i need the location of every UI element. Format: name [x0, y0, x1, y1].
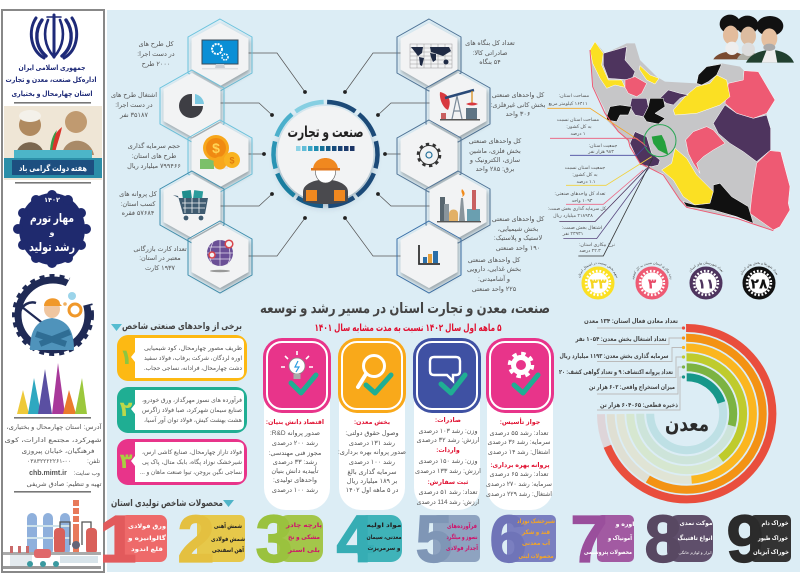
card: establishment licenses: پروانه بهره برداری:: [490, 462, 550, 469]
chart labels: تعداد معادن فعال استان: ۱۳۴ معدن: [584, 318, 678, 325]
product 1: steel sheet: قلع اندود: [131, 546, 163, 553]
caption: metal units: بخش فلزی، ماشین: [469, 148, 521, 155]
product 3: textile: [255, 502, 323, 574]
box 1: دشت چهارمحال، فرادانه، نساجی حجاب.: [144, 365, 242, 372]
chart heading: معدن: [665, 413, 709, 436]
card: mining sector: رشد ۱۰۰ درصدی: [349, 459, 395, 466]
caption: trade cards: ۱۹۳۷ کارت: [145, 265, 176, 272]
caption: export firms: تعداد کل بنگاه های: [465, 39, 515, 47]
card: knowledge economy: اقتصاد دانش بنیان:: [266, 419, 324, 426]
stat: share of country: [632, 262, 672, 300]
card: establishment licenses: تعداد: رشد ۵۵ درصدی: [489, 430, 549, 437]
caption: export firms: صادراتی کالا:: [473, 50, 508, 57]
stat: districts: ۲۸: [750, 276, 768, 292]
card: knowledge economy: رشد ۱۰۰ درصدی: [272, 487, 318, 494]
product 1: steel sheet: [99, 502, 167, 574]
card: exports and imports: [413, 338, 481, 510]
card: establishment licenses: اشتغال: رشد ۲۲۹ درصدی: [486, 491, 552, 498]
picture: government week banner: هفته دولت گرامی باد: [19, 163, 87, 173]
card: establishment licenses: جواز تأسیس:: [500, 417, 540, 426]
label: population: جمعیت استان:: [589, 143, 617, 149]
stat: industry jobs share: سهم بخش صنعت در اشتغال استان: [578, 262, 618, 278]
label: unemployment: نرخ بیکاری استان:: [579, 242, 615, 248]
product 5: refractory: آجدار فولادی: [446, 543, 479, 552]
product 4: minerals and cement: و سرمریزت: [368, 545, 401, 552]
caption: permits: کل پروانه های: [119, 191, 158, 198]
box 1: ۱: [120, 346, 132, 369]
product 1: steel sheet: گالوانیزه و: [127, 534, 166, 542]
caption: metal units: سازی، الکترونیک و: [469, 157, 520, 164]
stat: counties: تعداد شهرستان های استان: [690, 261, 724, 272]
hexagon: investment coins: [188, 120, 252, 192]
caption: food units: بخش غذایی، دارویی: [467, 266, 521, 273]
product 3: textile: بلی استر: [287, 547, 320, 554]
caption: non-metal mineral units: [491, 92, 546, 118]
label: population share: به کل کشور:: [572, 172, 598, 178]
map labels: [548, 93, 617, 254]
product 1: steel sheet: ورق فولادی: [128, 523, 166, 530]
caption: chemical units: ۱۹۰ واحد صنعتی: [496, 245, 540, 252]
caption: trade cards: تعداد کارت بازرگانی: [133, 245, 187, 253]
center circle: industry and trade: [252, 81, 399, 227]
card: mining sector: رشد ۱۳۱ درصدی: [349, 440, 395, 447]
caption: food units: کل واحدهای صنعتی: [468, 257, 521, 264]
product 9: animal feed: خوراک آبزیان: [753, 547, 789, 556]
address block: ۰۳۸۳۲۲۲۲۲۶۱-۰۰: [27, 459, 71, 465]
product 2: steel billet: [177, 502, 245, 574]
label: investment: کل سرمایه گذاری بخش صمت:: [548, 205, 607, 212]
product 3: textile: پارچه چادر: [285, 522, 322, 529]
product 8: carpets: انواع تافتینگ: [678, 534, 712, 542]
caption: project jobs: [111, 92, 157, 119]
chart labels: میزان استخراج واقعی: ۶۰۲ هزار تن: [589, 384, 675, 391]
badge: year slogan: مهار تورم: [30, 211, 74, 226]
badge: year slogan: و: [49, 228, 55, 237]
panel: right hexagons: [397, 19, 490, 293]
card: knowledge economy: مجوز فنی مهندسی:: [269, 450, 321, 457]
chart labels: [559, 318, 679, 409]
icon: magnifier with check: [358, 356, 391, 393]
label: industrial units: تعداد کل واحدهای صنعتی:: [554, 191, 606, 197]
badge: year slogan: ۱۴۰۲: [44, 197, 60, 204]
caption: permits: ۵۷۶۸۴ فقره: [122, 210, 155, 217]
sidebar heading: جمهوری اسلامی ایران: [18, 65, 86, 72]
label: population share: [565, 165, 605, 185]
product 4: minerals and cement: معدنی، سیمان: [366, 534, 402, 541]
caption: metal units: کل واحدهای صنعتی: [469, 138, 522, 145]
product 7: petrochemicals: محصولات پتروشیمی: [584, 549, 632, 556]
product 8: carpets: [644, 502, 713, 574]
card: establishment licenses: سرمایه: رشد ۳۶ درصدی: [487, 439, 550, 446]
label: population: ۹۸۳ هزار نفر: [587, 149, 614, 155]
stat: industry jobs share: [578, 262, 618, 300]
card: knowledge economy: واحدهای تولیدی:: [273, 477, 317, 484]
caption: non-metal mineral units: بخش کانی غیرفلزی:: [491, 102, 546, 109]
product 8: carpets: موکت نمدی: [680, 520, 713, 527]
label: unemployment: [579, 242, 615, 254]
card: exports and imports: ارزش: رشد 114 درصدی: [416, 499, 480, 506]
product 2: steel billet: شمش فولادی: [211, 536, 245, 543]
main section title: صنعت، معدن و تجارت استان در مسیر رشد و توسعه: [260, 301, 550, 317]
box 3: نساجی نگین بروجن، تیوا صنعت ماهان و ...: [140, 468, 242, 476]
panel: left hexagon captions: [111, 41, 187, 272]
hexagon: shopping cart: [160, 171, 224, 243]
chart labels: تعداد پروانه اکتشاف: ۹ و تعداد گواهی کشف: ۲۰: [559, 368, 673, 376]
card: mining sector: بخش معدن:: [354, 419, 390, 426]
label: population share: جمعیت استان نسبت: [565, 165, 605, 171]
caption: food units: ۲۲۵ واحد صنعتی: [472, 286, 517, 293]
label: area share: ۱ درصد: [571, 132, 585, 137]
hexagon: gear: [397, 120, 461, 192]
label: industrial units: ۱۰۹۳ واحد: [572, 198, 593, 204]
stat: counties: ۱۱: [697, 276, 715, 292]
product 5: refractory: فرآورده‌های: [447, 521, 477, 530]
stat: industry jobs share: ۳۳: [589, 276, 607, 292]
card: exports and imports: صادرات:: [435, 417, 461, 424]
chart labels: ذخیره قطعی: ۶۰۴۰۶۵ هزار تن: [600, 402, 679, 409]
caption: project jobs: ۳۵۱۸۷ نفر: [119, 112, 148, 119]
leader dots: [682, 326, 685, 379]
card: exports and imports: تعداد: رشد ۵۱ درصدی: [418, 489, 478, 496]
caption: projects: [137, 41, 175, 68]
caption: chemical units: [492, 216, 545, 252]
hexagon: bar chart: [397, 221, 461, 293]
product 3: textile: مشکی و نخ: [288, 534, 320, 541]
caption: projects: کل طرح های: [138, 41, 174, 48]
product 8: carpets: ابزار و لوازم خانگی: [678, 550, 712, 555]
caption: non-metal mineral units: ۳۰۶ واحد: [506, 111, 530, 118]
caption: projects: در دست اجرا:: [137, 51, 175, 58]
label: investment: ۲۱۸۹۴۸ میلیارد ریال: [553, 213, 593, 219]
card: knowledge economy: [263, 338, 331, 510]
caption: metal units: [469, 138, 522, 173]
label: population share: ۱.۱ درصد: [577, 180, 595, 185]
panel: right hexagon captions: [465, 39, 546, 293]
product 9: animal feed: [726, 502, 791, 574]
caption: food units: [467, 257, 521, 293]
chart labels: تعداد اشتغال بخش معدن: ۱۰۵۴ نفر: [575, 336, 666, 343]
sidebar heading: اداره‌کل صنعت، معدن و تجارت: [6, 76, 96, 84]
card: exports and imports: ارزش: رشد ۳۲ درصدی: [416, 437, 480, 444]
connector lines: [215, 53, 430, 256]
caption: trade cards: معتبر در استان:: [139, 255, 181, 262]
marker: [111, 324, 122, 331]
card: mining sector: در ۵ ماهه اول ۱۴۰۲: [346, 487, 398, 494]
card: knowledge economy: رشد: ۳۳ درصدی: [273, 459, 317, 466]
address block: [4, 422, 102, 488]
box 2: صنایع سیمان شهرکرد، صبا فولاد زاگرس: [142, 406, 242, 414]
product 7: petrochemicals: [570, 502, 634, 574]
icon: miner with gear: [14, 276, 92, 354]
hexagon: investment coins: $: [212, 140, 220, 156]
caption: chemical units: لاستیک و پلاستیک:: [494, 235, 542, 242]
address block: شهرکرد، مجتمع ادارات، کوی: [4, 437, 102, 444]
caption: export firms: [465, 39, 515, 66]
caption: trade cards: [133, 245, 187, 272]
icon: light bulb with check: [281, 351, 316, 393]
center heading: صنعت و تجارت: [288, 124, 364, 141]
hexagon: projects under way: [188, 19, 252, 91]
chart: mining radial bars: [559, 318, 772, 499]
stat: districts: [740, 262, 778, 300]
box 2: ۲: [120, 398, 133, 421]
card: exports and imports: ارزش: رشد ۱۳۳ درصدی: [415, 468, 481, 475]
box 3: شیرخشک نوزاد پگاه، بابک متال، پاک پی: [142, 458, 242, 466]
icon: worker: [303, 158, 348, 204]
caption: export firms: ۵۴ بنگاه: [479, 58, 501, 66]
color squares strip: [296, 146, 354, 151]
product 6: food: قند و شکر: [521, 529, 550, 536]
heading: top units: برخی از واحدهای صنعتی شاخص: [122, 321, 242, 332]
caption: project jobs: در دست اجرا:: [115, 102, 153, 109]
panel: left hexagons: [160, 19, 252, 293]
product 5: refractory: [415, 502, 480, 574]
label: area share: به کل کشور:: [566, 124, 592, 130]
address block: تلفن:: [87, 458, 100, 465]
product 2: steel billet: آهن اسفنجی: [212, 545, 245, 554]
label: industrial units: [554, 191, 606, 204]
card: knowledge economy: رشد ۲۰۰ درصدی: [272, 440, 318, 447]
card: mining sector: سرمایه گذاری بالغ: [347, 468, 397, 476]
card: exports and imports: ثبت سفارش:: [428, 479, 468, 486]
caption: non-metal mineral units: کل واحدهای صنعتی: [492, 92, 545, 99]
box 2: فرآورده های نسوز مهرگداز، ورق خودرو،: [142, 395, 242, 404]
icon: gear with check: [510, 354, 538, 393]
product 6: food: شیرخشک نوزاد: [517, 518, 555, 525]
address block: chb.mimt.ir: [29, 470, 67, 477]
product 7: petrochemicals: اوره و: [615, 521, 634, 528]
card: mining sector: وصول حقوق دولتی:: [345, 430, 399, 437]
address block: آدرس: استان چهارمحال و بختیاری،: [6, 422, 102, 431]
icon: speech bubble with check: [430, 357, 465, 393]
caption: investment: طرح های استان:: [132, 153, 176, 160]
card: mining sector: بر ۱۸۹ میلیارد ریال: [347, 478, 397, 485]
label: area share: [557, 117, 600, 137]
hexagon: investment coins: $: [229, 156, 235, 166]
caption: chemical units: کل واحدهای صنعتی: [492, 216, 545, 223]
panel: growth cards: [263, 338, 554, 510]
panel: products row: [99, 502, 791, 574]
card: exports and imports: وزن: رشد ۱۰۳ درصدی: [418, 428, 478, 435]
hexagon: world map: [397, 19, 461, 91]
product 9: animal feed: خوراک دام: [762, 519, 788, 527]
product 6: food: آب معدنی: [522, 538, 551, 547]
chart: colored peaks: [17, 363, 87, 414]
leader lines: [597, 328, 682, 410]
card: establishment licenses: سرمایه: رشد ۲۷۰ درصدی: [486, 481, 552, 488]
box 1: [117, 335, 247, 381]
panel: left sidebar: [2, 10, 104, 572]
product 6: food: [489, 502, 556, 574]
box 2: هشت بهشت کیش، فولاد توان آور آسیا،: [144, 415, 242, 424]
label: employment: [562, 225, 602, 237]
panel: top industrial units: [111, 321, 247, 485]
sidebar heading: [6, 65, 96, 98]
stat: share of country: رتبه بیکاری استان نسبت به کل کشور: [632, 262, 672, 280]
marker: [223, 500, 234, 507]
portraits of leaders: [713, 15, 794, 63]
card: knowledge economy: صدور پروانه R&D:: [270, 430, 320, 437]
label: population: [587, 143, 617, 155]
label: employment: ۲۳۹۳۱ نفر: [562, 231, 583, 237]
caption: permits: [119, 191, 158, 217]
label: unemployment: ۲۲.۳ درصد: [579, 248, 601, 254]
label: area share: مساحت استان نسبت: [557, 117, 600, 123]
caption: permits: کسب استان:: [121, 201, 156, 208]
hexagon: globe business card: [188, 221, 252, 293]
caption: metal units: برق: ۲۸۵ واحد: [476, 166, 515, 173]
stat: counties: [690, 261, 724, 300]
label: employment: اشتغال بخش صمت:: [562, 225, 602, 231]
section subtitle: ۵ ماهه اول سال ۱۴۰۲ نسبت به مدت مشابه سال ۱۴۰۱: [314, 323, 502, 334]
map of Iran: [547, 42, 790, 256]
picture: government week banner: [4, 106, 102, 180]
caption: projects: ۲۰۰۰ طرح: [142, 61, 170, 68]
caption: investment: حجم سرمایه گذاری: [128, 142, 180, 150]
stat: share of country: ۳: [648, 276, 657, 292]
product 5: refractory: نسوز و میلگرد: [446, 533, 478, 541]
card: establishment licenses: اشتغال: رشد ۱۴ درصدی: [488, 449, 550, 456]
hexagon: refinery: [426, 171, 490, 243]
card: exports and imports: وزن: رشد ۱۵۰ درصدی: [418, 458, 478, 465]
address block: وب سایت:: [74, 470, 100, 477]
box 3: فولاد تاراز چهارمحال، صنایع کاشی ارس،: [142, 449, 242, 456]
sidebar heading: استان چهارمحال و بختیاری: [12, 91, 92, 98]
hexagon: oil pump: [426, 70, 490, 142]
label: province area: مساحت استان:: [559, 93, 590, 99]
icon: national emblem: [31, 15, 77, 58]
card: establishment licenses: تعداد: رشد ۶۵ درصدی: [489, 471, 549, 478]
box 1: ظریف مصور چهارمحال، کود شیمیایی: [144, 345, 242, 352]
address block: تهیه و تنظیم: صادق شریفی: [26, 481, 102, 488]
badge: year slogan: رشد تولید: [29, 240, 75, 255]
label: investment: [548, 205, 607, 219]
box 1: اوره لردگان، شرکت برفاب، فولاد سفید: [144, 354, 242, 362]
card: exports and imports: واردات:: [436, 447, 460, 454]
product 4: minerals and cement: [336, 502, 402, 574]
product 9: animal feed: خوراک طیور: [757, 534, 788, 542]
card: knowledge economy: تأییدیه دانش بنیان: [271, 466, 319, 475]
product 7: petrochemicals: آمونیاک و: [607, 533, 633, 542]
box 3: [117, 439, 247, 485]
address block: فرهنگیان، خیابان پیروزی: [22, 447, 94, 455]
caption: investment: ۷۹۹۴۶۶ میلیارد ریال: [127, 163, 181, 170]
card: establishment licenses: [486, 338, 554, 510]
box 2: [117, 387, 247, 433]
caption: investment: [127, 142, 181, 170]
label: province area: [548, 93, 590, 107]
caption: food units: و آشامیدنی:: [478, 274, 510, 283]
card: mining sector: صدور پروانه بهره برداری:: [338, 449, 406, 456]
box 3: ۳: [120, 450, 133, 473]
caption: chemical units: بخش شیمیایی،: [498, 226, 538, 233]
product 2: steel billet: شمش آهنی: [214, 521, 242, 530]
heading: key products: محصولات شاخص تولیدی استان: [111, 498, 223, 509]
icon: factory: [3, 500, 101, 569]
stat circles row: [578, 261, 778, 300]
badge: year slogan: [13, 190, 91, 268]
product 6: food: محصولات لبنی: [518, 553, 554, 560]
chart labels: سرمایه گذاری بخش معدن: ۱۱۹۳ میلیارد ریال: [560, 352, 668, 360]
stat: districts: تعداد شهرها و بخش های استان: [740, 262, 778, 276]
product 4: minerals and cement: مواد اولیه: [366, 522, 402, 529]
label: province area: ۱۶۴۱۱ کیلومتر مربع: [548, 101, 588, 107]
caption: project jobs: اشتغال طرح های: [111, 92, 157, 99]
hexagon: jobs pie chart: [160, 70, 224, 142]
card: mining sector: [338, 338, 406, 510]
